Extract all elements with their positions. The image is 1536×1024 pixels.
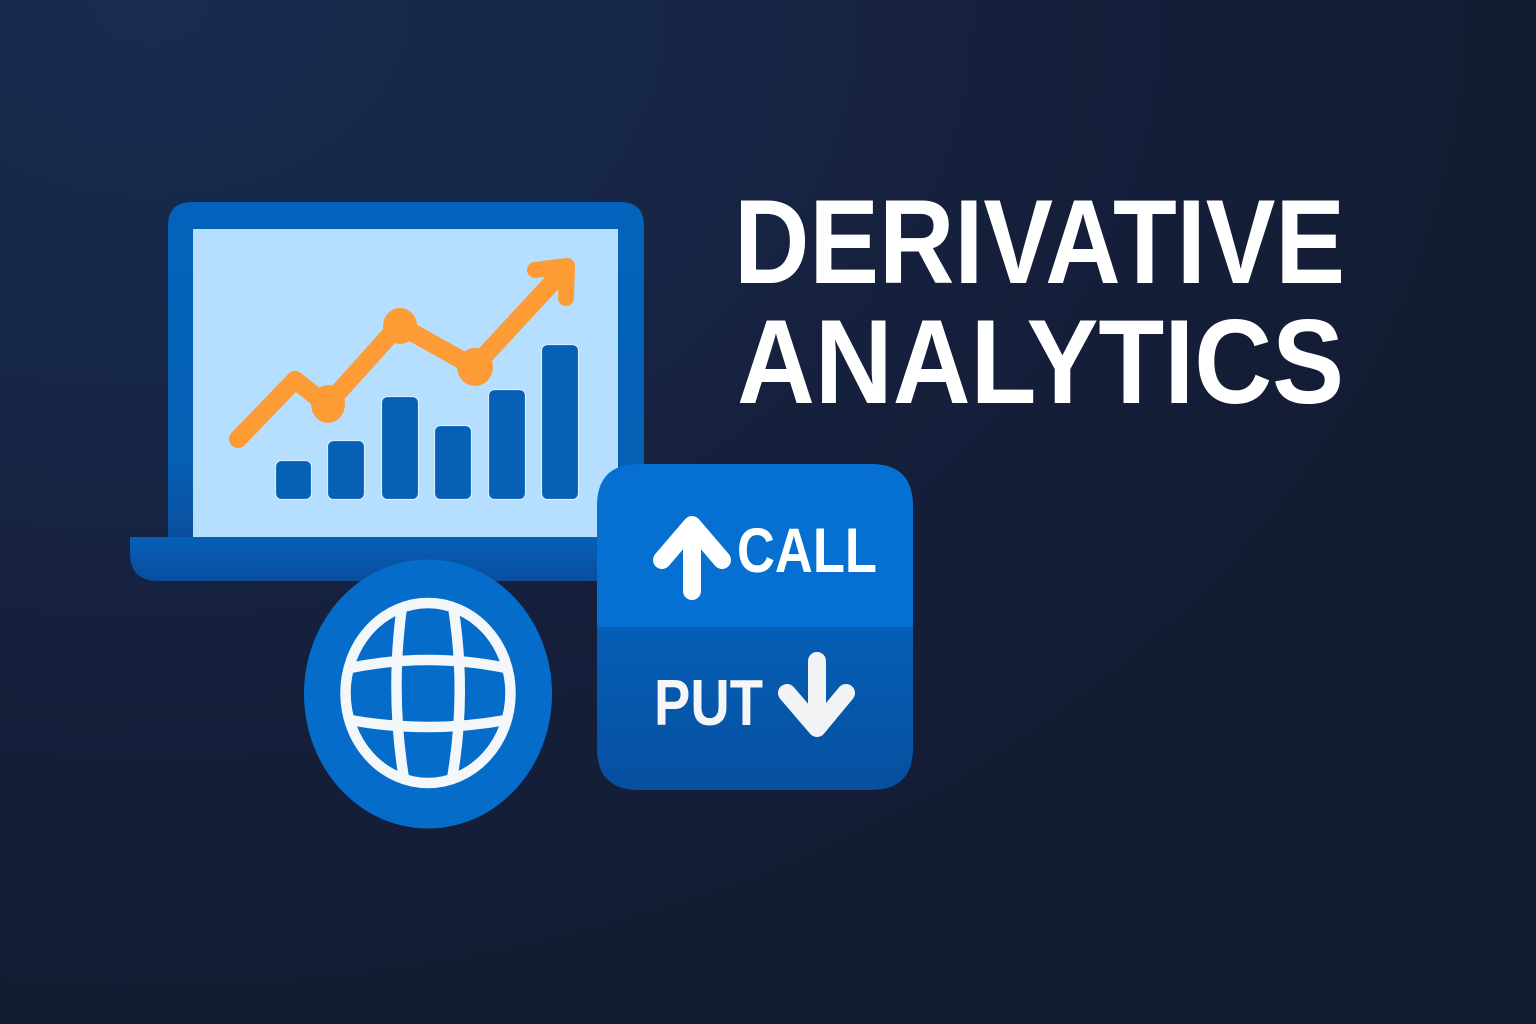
panel: call and put: [597, 464, 913, 790]
title line 2: ANALYTICS: [737, 295, 1344, 429]
put label: PUT: [654, 666, 763, 739]
title: [734, 175, 1345, 429]
call label: CALL: [737, 516, 877, 586]
put panel: [597, 627, 913, 790]
bar chart: [276, 344, 578, 500]
call panel: [597, 464, 913, 628]
icon: globe: [304, 560, 552, 828]
line chart with arrow: [238, 266, 567, 439]
laptop base: [130, 537, 640, 581]
icon: laptop with chart: [130, 202, 644, 581]
icon: down arrow: [787, 661, 846, 728]
laptop frame: [168, 202, 644, 540]
laptop screen: [193, 229, 618, 537]
icon: up arrow: [662, 525, 722, 591]
title line 1: DERIVATIVE: [734, 175, 1345, 309]
